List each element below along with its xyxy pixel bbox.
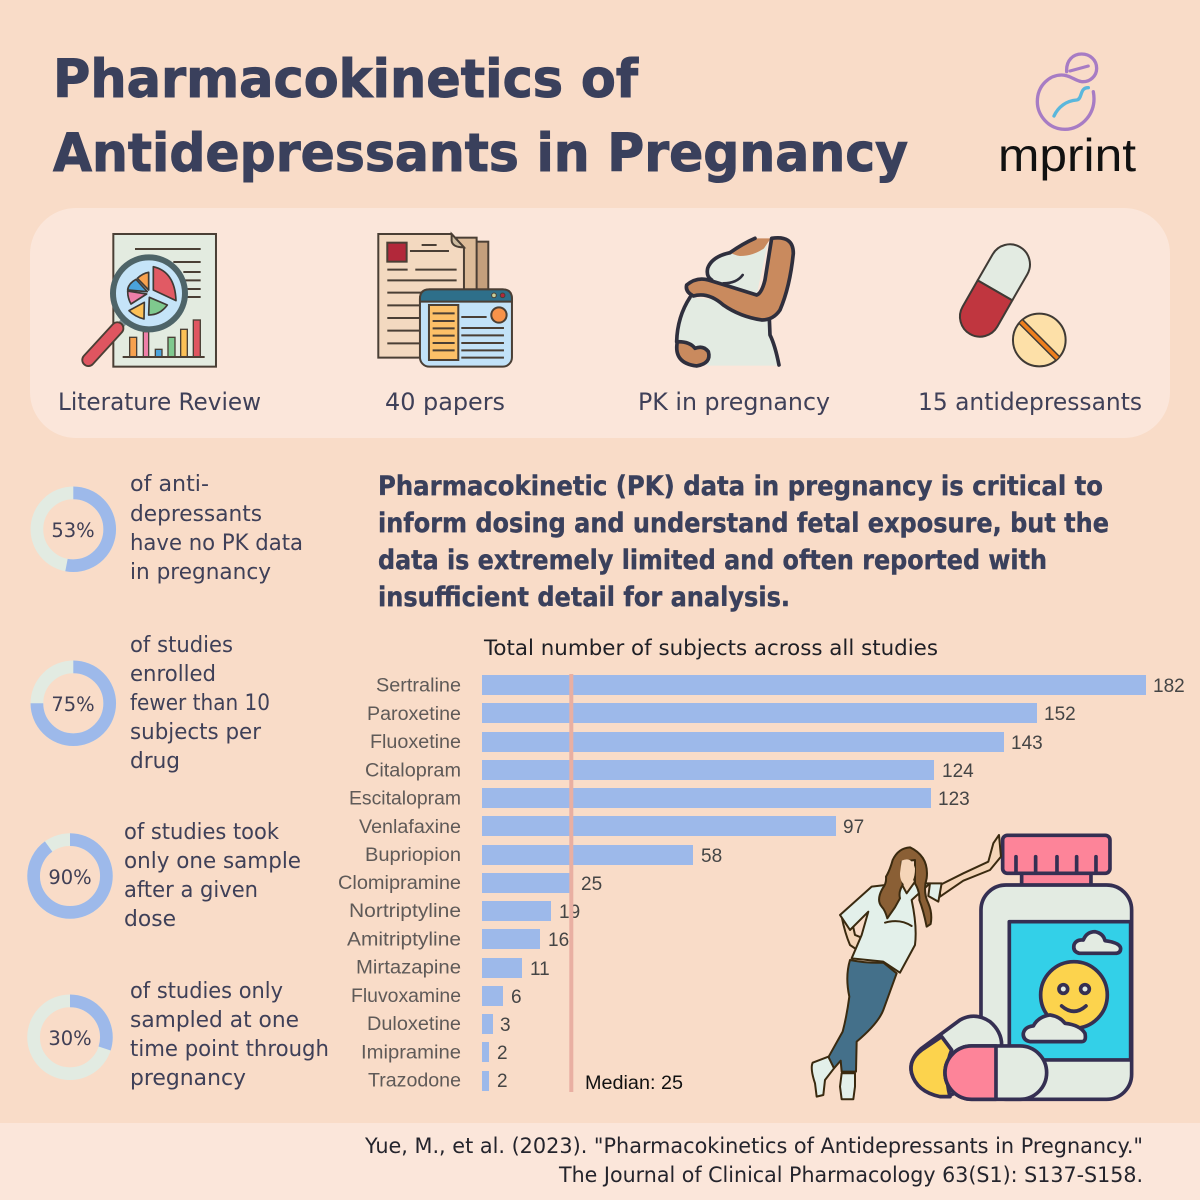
stat: 75 percent	[37, 632, 270, 774]
stat text: in pregnancy	[130, 559, 271, 585]
stat: 30 percent	[34, 978, 329, 1091]
stat text	[124, 819, 301, 932]
stat text: fewer than 10	[130, 690, 270, 716]
drug labels: Amitriptyline	[347, 930, 461, 950]
bar chart: total subjects	[338, 636, 1185, 1094]
chart title: Total number of subjects across all studies	[483, 636, 938, 661]
stat: 53 percent: 53%	[51, 519, 95, 542]
drug labels: Citalopram	[365, 760, 461, 782]
bar values: 2	[497, 1043, 508, 1064]
drug labels: Duloxetine	[367, 1014, 461, 1035]
drug labels: Imipramine	[361, 1042, 461, 1064]
bar values: 58	[701, 846, 722, 867]
title	[53, 49, 908, 184]
stat text	[130, 471, 303, 585]
bar values: 123	[938, 789, 970, 810]
stat text: time point through	[130, 1036, 329, 1062]
median line	[569, 674, 573, 1092]
title: Antidepressants in Pregnancy	[53, 123, 908, 184]
panel: study overview	[30, 208, 1170, 438]
bar values: 25	[581, 874, 602, 895]
bar values: 11	[530, 959, 550, 980]
key message: data is extremely limited and often reported with	[378, 545, 1047, 576]
drug labels: Venlafaxine	[359, 817, 461, 838]
drug labels: Escitalopram	[349, 788, 461, 810]
pills	[911, 1016, 1047, 1099]
bar values: 2	[497, 1071, 508, 1092]
icon: papers	[378, 234, 512, 367]
key message: inform dosing and understand fetal exposure, but the	[378, 508, 1109, 539]
stat text: depressants	[130, 501, 262, 527]
drug labels: Mirtazapine	[356, 958, 461, 978]
median label: Median: 25	[585, 1073, 683, 1094]
drug labels	[338, 676, 461, 1092]
stat text: sampled at one	[130, 1007, 299, 1033]
bar values: 16	[548, 930, 569, 951]
bar values: 124	[942, 761, 974, 782]
stat text: after a given	[124, 877, 258, 903]
drug labels: Clomipramine	[338, 873, 461, 894]
stat text: subjects per	[130, 719, 262, 745]
key message: Pharmacokinetic (PK) data in pregnancy is critical to	[378, 471, 1103, 502]
drug labels: Fluvoxamine	[351, 986, 461, 1007]
key message	[378, 471, 1109, 613]
bar values: 6	[511, 987, 522, 1008]
logo: mprint: mprint	[998, 129, 1136, 181]
label: PK in pregnancy: PK in pregnancy	[638, 388, 830, 416]
stat: 75 percent: 75%	[51, 693, 95, 716]
icon: capsule and tablet	[960, 244, 1066, 366]
stat text: only one sample	[124, 848, 301, 874]
label: 15 antidepressants: 15 antidepressants	[918, 388, 1142, 416]
stat: 30 percent: 30%	[48, 1027, 92, 1050]
drug labels: Nortriptyline	[349, 901, 461, 922]
stat text: enrolled	[130, 661, 216, 687]
donut: 53%	[37, 493, 110, 566]
icon: literature review	[88, 234, 216, 367]
woman	[812, 835, 1001, 1099]
bottle	[981, 835, 1132, 1099]
citation footer	[0, 1123, 1200, 1200]
citation footer: The Journal of Clinical Pharmacology 63(S1): S137-S158.	[558, 1163, 1143, 1187]
donut: 30%	[34, 1001, 106, 1074]
stat text	[130, 978, 329, 1091]
bar values	[497, 676, 1185, 1092]
stat text: drug	[130, 748, 180, 774]
stat text: have no PK data	[130, 530, 303, 556]
label: literature review: Literature Review	[58, 388, 261, 416]
title: Pharmacokinetics of	[53, 49, 639, 110]
donut: 90%	[34, 840, 106, 912]
stat text: of studies only	[130, 978, 283, 1004]
bar values: 182	[1153, 676, 1185, 697]
bar values: 97	[843, 817, 864, 838]
stat text: of studies took	[124, 819, 279, 845]
key message: insufficient detail for analysis.	[378, 582, 790, 613]
stat: 53 percent	[37, 471, 303, 585]
donut: 75%	[37, 667, 110, 740]
stat text: of studies	[130, 632, 233, 658]
bar values: 152	[1044, 704, 1076, 725]
logo: mprint	[998, 54, 1136, 181]
bars	[482, 675, 1146, 1091]
stat text: dose	[124, 906, 176, 932]
stat text: pregnancy	[130, 1065, 246, 1091]
bar values: 143	[1011, 733, 1043, 754]
stat text	[130, 632, 270, 774]
drug labels: Fluoxetine	[370, 732, 461, 753]
drug labels: Sertraline	[376, 676, 461, 696]
label: 40 papers: 40 papers	[385, 388, 505, 416]
citation footer: Yue, M., et al. (2023). "Pharmacokinetics of Antidepressants in Pregnancy."	[364, 1134, 1143, 1158]
drug labels: Bupriopion	[365, 845, 461, 866]
icon: pregnant person	[677, 238, 793, 366]
stat text: of anti-	[130, 471, 209, 497]
drug labels: Paroxetine	[367, 704, 461, 725]
stat: 90 percent	[34, 819, 301, 932]
illustration: woman leaning on pill bottle	[812, 835, 1132, 1099]
drug labels: Trazodone	[368, 1070, 461, 1092]
bar values: 3	[500, 1015, 511, 1036]
stat: 90 percent: 90%	[48, 866, 92, 889]
bar values: 19	[559, 902, 580, 923]
